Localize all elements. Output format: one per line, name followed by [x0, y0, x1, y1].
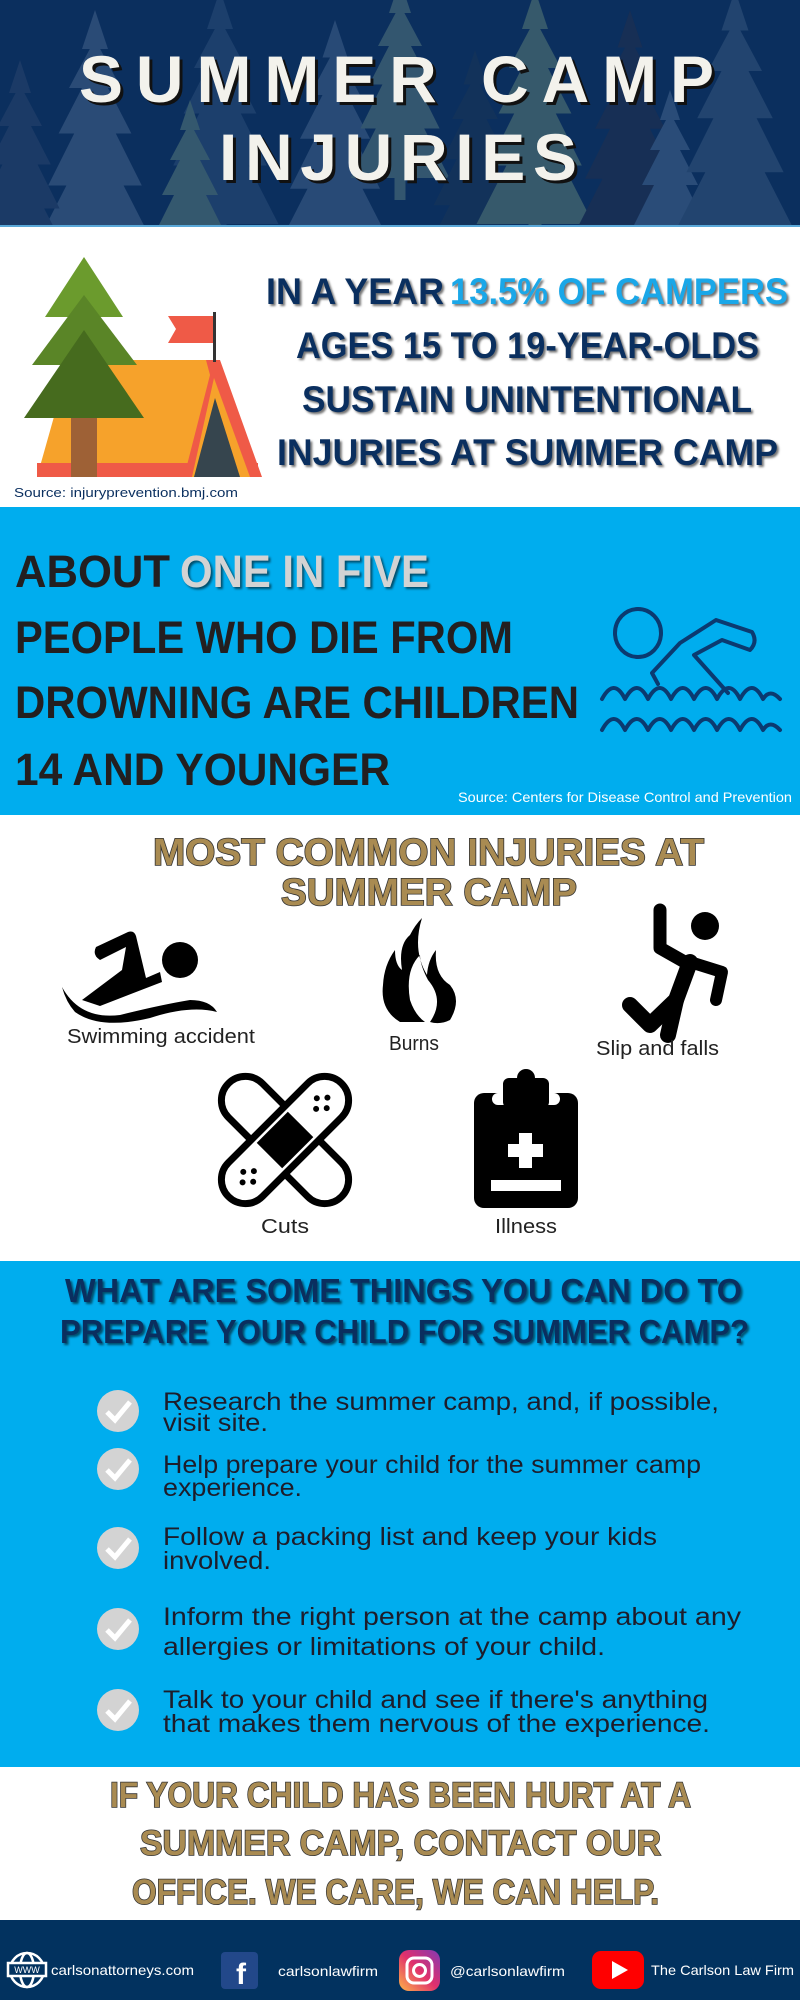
stat text: SUSTAIN UNINTENTIONAL [302, 379, 752, 420]
title: SUMMER CAMP [79, 42, 714, 116]
heading: MOST COMMON INJURIES AT [153, 832, 704, 874]
panel: preparation tips [0, 1261, 800, 1767]
icon: slip and fall [630, 910, 722, 1035]
stat text: IN A YEAR [266, 271, 444, 312]
item 3: involved. [163, 1547, 271, 1575]
icon: facebook [221, 1952, 258, 1991]
label: Slip and falls [596, 1038, 719, 1060]
icon: instagram [399, 1950, 440, 1991]
item 4: allergies or limitations of your child. [163, 1633, 605, 1661]
drowning text: 14 AND YOUNGER [15, 744, 390, 795]
panel: call to action [0, 1767, 800, 1920]
panel: drowning statistic [0, 507, 800, 815]
item 2: Help prepare your child for the summer camp [163, 1451, 701, 1479]
heading [60, 1272, 749, 1350]
panel: call to action: IF YOUR CHILD HAS BEEN HURT AT A [110, 1776, 691, 1815]
item 3 [97, 1523, 657, 1575]
footer: carlsonlawfirm [278, 1963, 378, 1979]
icon: website globe: WWW [14, 1965, 40, 1975]
panel: call to action: SUMMER CAMP, CONTACT OUR [140, 1824, 661, 1863]
footer: @carlsonlawfirm [450, 1963, 565, 1979]
heading: SUMMER CAMP [281, 872, 577, 914]
heading: PREPARE YOUR CHILD FOR SUMMER CAMP? [60, 1313, 749, 1350]
label: Swimming accident [67, 1026, 255, 1048]
panel: campers statistic [0, 225, 800, 507]
item 4 [97, 1603, 742, 1661]
footer [0, 1920, 800, 2000]
footer: The Carlson Law Firm [651, 1962, 794, 1978]
icon: swimmer outline [602, 609, 780, 730]
item 5: Talk to your child and see if there's anything [163, 1686, 708, 1714]
footer: carlsonattorneys.com [51, 1962, 194, 1978]
item 2: experience. [163, 1474, 302, 1502]
drowning text: DROWNING ARE CHILDREN [15, 677, 579, 728]
drowning text: ABOUT [15, 546, 170, 597]
drowning text: PEOPLE WHO DIE FROM [15, 612, 513, 663]
stat text [266, 271, 788, 473]
heading: WHAT ARE SOME THINGS YOU CAN DO TO [65, 1272, 742, 1309]
label: Illness [495, 1216, 557, 1238]
checklist [97, 1388, 742, 1738]
title: INJURIES [219, 120, 577, 194]
drowning text: ONE IN FIVE [180, 546, 429, 597]
item 4: Inform the right person at the camp about any [163, 1603, 742, 1631]
stat text: AGES 15 TO 19-YEAR-OLDS [296, 325, 759, 366]
icon: swimming accident [62, 932, 217, 1023]
heading [153, 832, 704, 914]
icon: youtube [592, 1951, 644, 1989]
source: Source: Centers for Disease Control and Prevention [458, 789, 792, 805]
icon: cuts bandages [211, 1066, 359, 1214]
label: Burns [389, 1033, 439, 1055]
icon: burns flame [383, 918, 456, 1023]
item 1 [97, 1388, 719, 1437]
item 1: visit site. [163, 1409, 268, 1437]
item 1: Research the summer camp, and, if possible, [163, 1388, 719, 1416]
header [0, 0, 800, 225]
drowning text [15, 546, 579, 795]
icon: tent and tree [24, 257, 262, 477]
title [79, 42, 714, 194]
panel: most common injuries [0, 815, 800, 1261]
stat text: INJURIES AT SUMMER CAMP [277, 432, 778, 473]
item 5: that makes them nervous of the experience. [163, 1710, 710, 1738]
label: Cuts [261, 1216, 309, 1238]
icon: website globe [8, 1953, 46, 1987]
item 2 [97, 1448, 701, 1502]
item 5 [97, 1686, 710, 1738]
panel: call to action: OFFICE. WE CARE, WE CAN HELP. [132, 1873, 659, 1912]
item 3: Follow a packing list and keep your kids [163, 1523, 657, 1551]
icon: facebook: f [236, 1958, 247, 1991]
icon: illness clipboard [474, 1069, 578, 1208]
source: Source: injuryprevention.bmj.com [14, 485, 238, 500]
